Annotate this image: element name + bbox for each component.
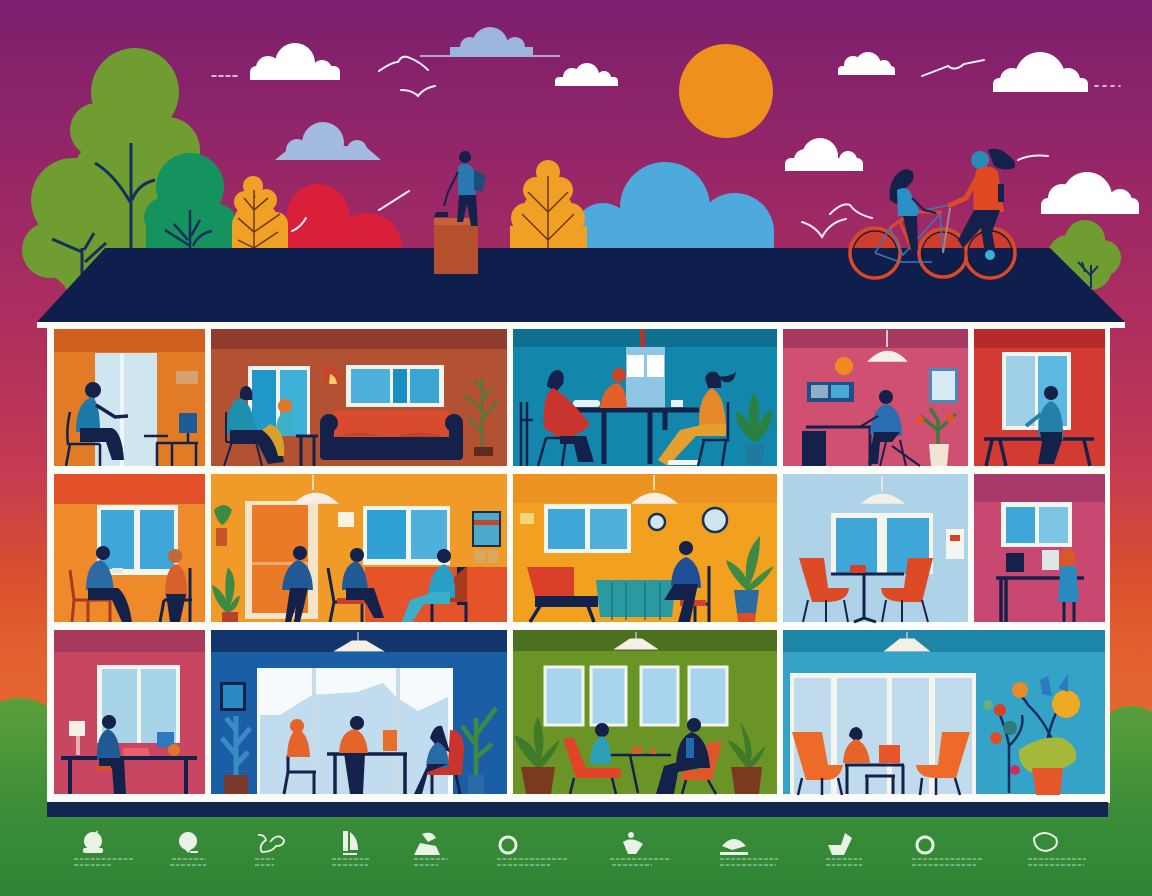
red armchair xyxy=(527,567,598,622)
lamp xyxy=(69,721,85,755)
hanging stem xyxy=(640,329,645,347)
framed picture xyxy=(929,368,958,403)
window xyxy=(1002,352,1071,430)
tree: small green right xyxy=(1048,220,1121,290)
side table xyxy=(296,436,318,466)
tree: orange leaf left xyxy=(232,176,288,248)
room 3-4 blue xyxy=(783,630,1105,795)
room 3-1 pink xyxy=(54,630,205,794)
person: right orange xyxy=(658,372,736,466)
person: right xyxy=(656,718,710,794)
round clocks xyxy=(649,508,727,532)
desk xyxy=(806,427,874,466)
wall frame xyxy=(220,682,246,711)
red chair left xyxy=(799,558,849,622)
desk with computer xyxy=(996,550,1084,622)
person: adult xyxy=(224,386,284,466)
icon 7 xyxy=(623,832,643,854)
icon 1 xyxy=(83,830,103,853)
bicycle: wheels and frame xyxy=(850,205,1015,278)
red chair right xyxy=(680,742,722,794)
bicycle: wheel fills xyxy=(851,230,1013,248)
person: left xyxy=(284,719,316,794)
cloud: pale blue top xyxy=(420,27,560,57)
desk xyxy=(61,758,197,794)
window xyxy=(1001,502,1072,547)
room 2-3 amber xyxy=(513,474,777,622)
table xyxy=(608,755,671,793)
window xyxy=(95,353,157,466)
table items xyxy=(573,400,683,407)
illegible caption marks under icons xyxy=(74,859,1086,865)
cyclists on roof xyxy=(850,149,1015,278)
person xyxy=(1026,386,1063,464)
person xyxy=(858,390,920,466)
icon 10 xyxy=(917,837,933,853)
plant xyxy=(465,378,498,456)
ceiling lamp xyxy=(869,330,906,361)
person: centre orange xyxy=(600,368,627,408)
person xyxy=(76,382,128,460)
chair xyxy=(66,412,100,466)
window xyxy=(97,665,180,743)
room 1-4 pink xyxy=(783,329,968,466)
cloud: white far right xyxy=(993,52,1088,92)
wall notes xyxy=(338,512,354,527)
small frames xyxy=(474,550,498,563)
cloud: red xyxy=(287,184,402,283)
cloud: big blue xyxy=(574,162,774,271)
cloud: periwinkle left xyxy=(275,122,381,164)
cloud: white center xyxy=(555,63,618,86)
ceiling lamp xyxy=(295,475,337,503)
rider: girl xyxy=(890,169,936,250)
birds xyxy=(212,57,1120,237)
room 1-2 brown xyxy=(211,329,507,466)
room 1-1 orange xyxy=(54,329,205,466)
room 1-5 red xyxy=(974,329,1105,466)
person: left xyxy=(590,723,611,764)
person: blue with chair xyxy=(70,546,132,622)
windows xyxy=(545,667,727,725)
window xyxy=(831,513,933,574)
red chair right xyxy=(881,558,933,622)
person: seated teal with chair xyxy=(402,549,467,622)
room 3-3 green xyxy=(513,630,777,794)
room 2-1 orange xyxy=(54,474,205,622)
centre cabinet window xyxy=(626,347,665,408)
plant: wall xyxy=(214,505,232,546)
desk items xyxy=(123,732,180,756)
plant xyxy=(726,536,774,622)
person: right with chair xyxy=(160,549,192,622)
plant xyxy=(916,408,956,466)
ceiling lamp xyxy=(885,632,929,651)
ceiling lamp xyxy=(335,632,383,651)
orange chair left xyxy=(792,732,843,795)
table xyxy=(831,574,904,622)
wall picture xyxy=(472,511,501,547)
window xyxy=(248,366,310,436)
tree: big green left xyxy=(22,48,200,292)
icon 3 xyxy=(258,835,284,852)
table xyxy=(845,765,904,794)
table items xyxy=(632,746,656,754)
window xyxy=(97,505,178,575)
plant xyxy=(736,392,772,465)
person xyxy=(1058,548,1079,622)
icon 2 xyxy=(179,832,198,853)
plant xyxy=(462,708,496,794)
large window xyxy=(257,668,453,794)
wall plaque xyxy=(176,371,198,384)
teal table xyxy=(596,580,676,620)
person: child xyxy=(262,399,294,456)
sofa xyxy=(320,410,463,460)
table xyxy=(327,754,407,794)
red chair left xyxy=(563,738,621,794)
blue plant xyxy=(222,716,250,794)
flowering tree xyxy=(983,674,1080,795)
person on chimney xyxy=(434,151,486,226)
person: red xyxy=(538,370,594,466)
orange chair right xyxy=(916,732,970,795)
icon 5 xyxy=(414,833,440,855)
cloud: white lower right xyxy=(1041,172,1139,214)
roof xyxy=(37,248,1125,322)
person: right with red chair xyxy=(414,726,464,794)
wall shelf with screen xyxy=(807,382,854,402)
plant left xyxy=(514,717,560,794)
tree: orange leaf center xyxy=(510,160,587,248)
house wall frame xyxy=(37,322,1125,803)
person xyxy=(96,715,126,794)
wall plaque xyxy=(520,513,534,524)
plant: floor xyxy=(212,567,240,622)
person xyxy=(843,727,900,763)
bench xyxy=(984,439,1094,466)
foundation band xyxy=(47,802,1108,817)
icon 4 xyxy=(343,831,358,855)
poster xyxy=(946,529,964,559)
chair far left xyxy=(521,402,533,466)
desk and monitor xyxy=(144,413,198,466)
clouds xyxy=(250,27,1139,283)
room 1-3 teal xyxy=(513,329,777,466)
chimney xyxy=(434,218,478,274)
tree: dark green xyxy=(144,153,236,248)
window xyxy=(363,506,450,565)
ceiling lamp xyxy=(615,632,657,649)
cloud: white mid right xyxy=(785,138,863,171)
cloud: white right small xyxy=(838,52,895,75)
ground and hills xyxy=(0,698,1152,896)
window xyxy=(544,504,631,553)
icon 9 xyxy=(828,833,852,855)
cloud: white upper left xyxy=(250,43,340,80)
person with chair xyxy=(664,541,709,622)
icon 6 xyxy=(500,837,516,853)
wall fruit xyxy=(835,357,853,375)
room 2-5 pink xyxy=(974,474,1105,622)
person: seated blue xyxy=(328,548,384,622)
icon 8 xyxy=(720,839,748,855)
large window xyxy=(790,673,976,794)
person: walking xyxy=(282,546,313,622)
wall lamp xyxy=(322,363,340,385)
ceiling lamp xyxy=(633,475,676,503)
wide window xyxy=(346,365,444,407)
orange box xyxy=(383,730,397,751)
room 2-2 amber xyxy=(211,474,507,622)
cup on table xyxy=(850,565,866,573)
table xyxy=(567,410,699,464)
ceiling lamp xyxy=(863,476,903,503)
footer icon row xyxy=(83,830,1057,855)
plant right xyxy=(728,722,766,794)
person: centre xyxy=(339,716,368,794)
room 3-2 blue xyxy=(211,630,507,794)
room 2-4 light blue xyxy=(783,474,968,622)
icon 11 xyxy=(1034,833,1057,851)
rider: man xyxy=(948,149,1015,260)
sun xyxy=(679,44,773,138)
drawer cabinet xyxy=(802,431,826,466)
door xyxy=(245,501,318,619)
